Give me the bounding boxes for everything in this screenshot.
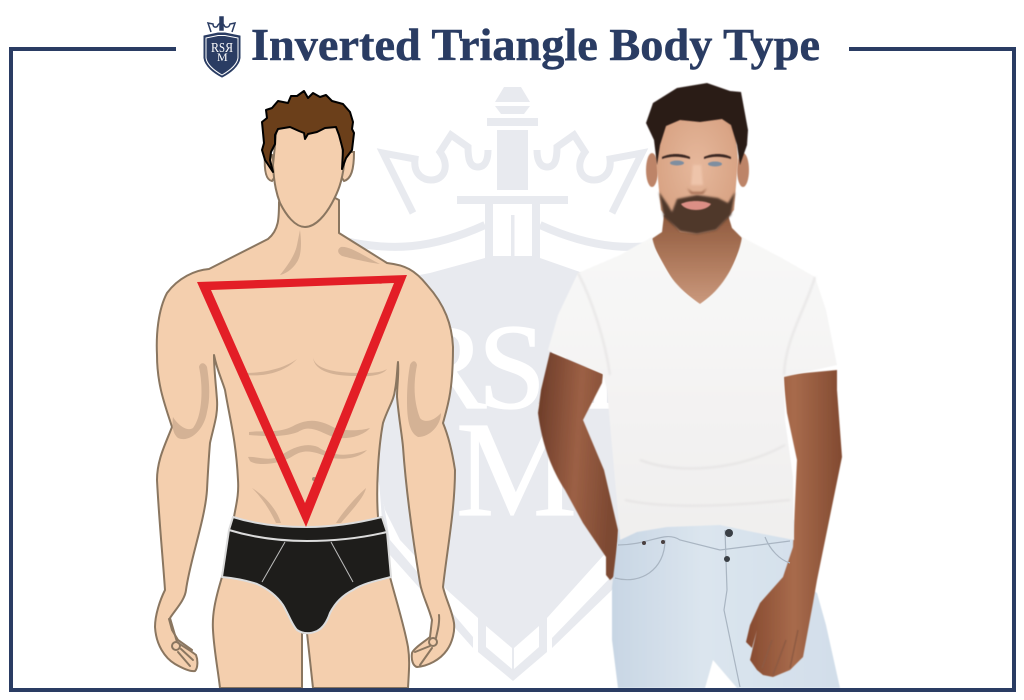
photo: face <box>656 110 738 234</box>
logo: monogram: S <box>219 41 225 56</box>
photo: right arm and hand <box>746 370 842 677</box>
logo: shield <box>204 33 240 77</box>
logo: crown <box>208 17 235 32</box>
illustration: male figure <box>155 91 455 688</box>
photo: man in white t-shirt <box>538 83 842 688</box>
figure: hand creases <box>169 615 439 666</box>
figure: hair <box>262 91 354 172</box>
watermark: lower shield bands <box>376 440 625 648</box>
title logo <box>204 17 240 77</box>
photo: nose <box>687 165 707 194</box>
photo: lips <box>681 201 711 210</box>
briefs: waistband line <box>229 530 387 541</box>
figure: ears <box>265 152 354 181</box>
figure: muscle shading <box>173 230 441 523</box>
watermark crest <box>345 87 680 681</box>
briefs: garment <box>222 517 391 633</box>
figure: briefs <box>222 517 391 633</box>
photo: ears <box>646 153 749 187</box>
briefs: seams <box>262 542 353 582</box>
watermark: monogram: R <box>538 300 620 435</box>
logo: monogram: M <box>217 50 228 64</box>
watermark: crown finial and sword <box>457 87 568 258</box>
figure: body silhouette <box>155 180 455 688</box>
logo: shield inner line <box>206 36 238 75</box>
photo: jeans details <box>615 529 790 687</box>
photo: eyes <box>662 154 731 166</box>
photo: beard <box>659 192 735 234</box>
photo: t-shirt folds <box>578 273 815 506</box>
watermark: chevron panels <box>486 626 539 669</box>
photo: left arm <box>538 352 618 580</box>
photo: jeans <box>612 520 840 688</box>
watermark: monogram: R <box>405 300 487 435</box>
photo: neck <box>650 215 744 305</box>
watermark: monogram: S <box>478 300 546 435</box>
logo: monogram <box>211 41 233 64</box>
logo: monogram: R <box>224 41 233 56</box>
watermark: shield body <box>350 256 660 681</box>
title: Inverted Triangle Body Type <box>251 20 820 70</box>
photo: hair <box>646 83 748 165</box>
figure: red inverted triangle <box>197 275 407 527</box>
photo: t-shirt <box>548 237 837 540</box>
logo: monogram: R <box>211 41 220 56</box>
watermark: monogram <box>405 300 620 545</box>
figure: face <box>273 125 344 227</box>
watermark: monogram: M <box>456 395 577 545</box>
photo: hand shading <box>762 630 798 675</box>
watermark: crown arches <box>345 135 680 247</box>
